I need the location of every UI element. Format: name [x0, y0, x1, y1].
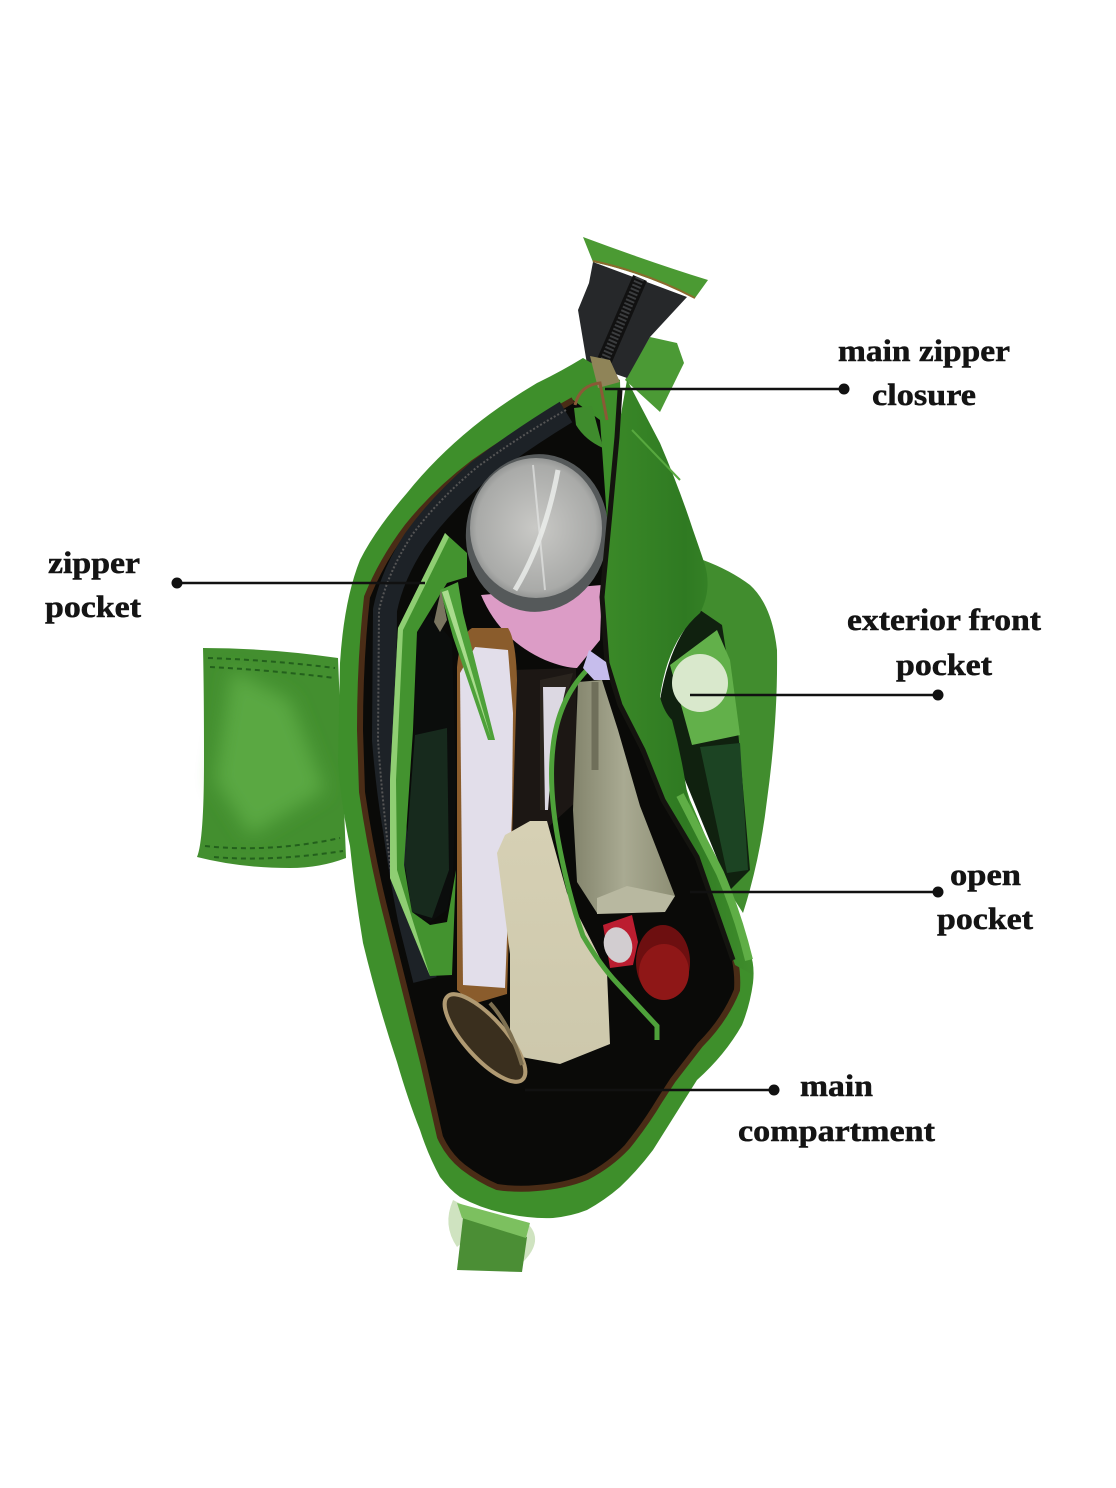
notebooks	[457, 628, 578, 1004]
brass mirror	[433, 983, 537, 1093]
second notebook	[540, 673, 573, 810]
cloth roll	[497, 821, 610, 1064]
side cup holder	[197, 648, 346, 868]
steel bottle	[456, 445, 618, 668]
label: exterior front pocket	[690, 602, 1042, 700]
main zipper pull	[574, 356, 620, 448]
exterior front pocket	[660, 560, 777, 913]
label: exterior front pocket: pocket	[896, 647, 993, 682]
label: main zipper closure	[605, 333, 1010, 412]
bottle in pocket	[670, 630, 748, 873]
inner pocket edge	[552, 670, 657, 1040]
label: exterior front pocket: exterior front	[847, 602, 1042, 637]
small phone	[405, 728, 449, 918]
label: zipper pocket	[45, 545, 425, 624]
bottom strap and ring	[448, 1200, 535, 1272]
label: main compartment	[525, 1068, 936, 1148]
pouch	[573, 680, 675, 914]
first notebook	[457, 628, 517, 1004]
front flap	[602, 380, 753, 975]
label: zipper pocket: pocket	[45, 589, 142, 624]
label: open pocket: open	[950, 857, 1021, 892]
label: zipper pocket: zipper	[48, 545, 140, 580]
label: main compartment: compartment	[738, 1113, 936, 1148]
zipper pocket flap	[390, 533, 495, 976]
top zipper end tab	[578, 237, 708, 412]
pink bottle body	[481, 585, 602, 668]
dark gap between books	[510, 668, 578, 830]
label: main zipper closure: closure	[872, 377, 976, 412]
label: open pocket: pocket	[937, 901, 1034, 936]
label: main zipper closure: main zipper	[838, 333, 1010, 368]
red cosmetic bottles	[600, 915, 690, 1000]
lavender zipper tag	[583, 650, 610, 680]
label: main compartment: main	[800, 1068, 873, 1103]
label: open pocket	[690, 857, 1034, 936]
main bag body	[338, 358, 754, 1218]
steel lid	[456, 445, 618, 621]
main compartment interior	[360, 400, 737, 1189]
